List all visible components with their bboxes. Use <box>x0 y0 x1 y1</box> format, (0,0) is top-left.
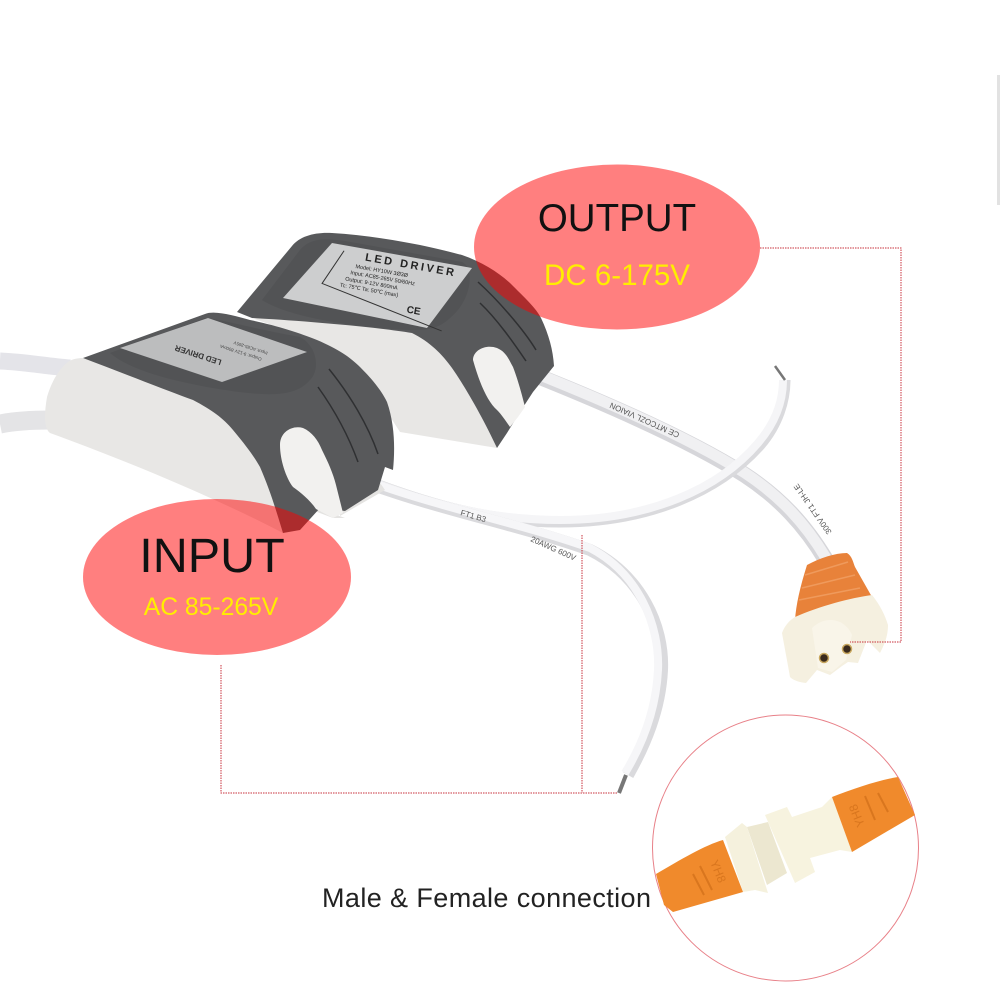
front driver label <box>120 318 307 382</box>
inner barrel <box>747 822 787 885</box>
front LED driver: Input: AC85-265V <box>233 340 268 356</box>
back driver recess <box>262 239 470 330</box>
callout leader: input <box>221 535 618 793</box>
thin input/output cables of front driver: 20AWG 600V <box>529 535 578 563</box>
output cable of back driver: 300V FT1 JH-LE <box>792 482 834 536</box>
back driver label text: Model: HY10W 3Ø3Ø <box>355 264 409 279</box>
sleeve text: YH8 <box>707 858 729 885</box>
front driver recess <box>110 318 316 394</box>
back driver label <box>283 243 472 328</box>
back LED driver <box>237 233 554 448</box>
male plug <box>765 797 852 883</box>
back LED driver: Tc: 75℃ Ta: 50℃ (max) <box>339 283 399 299</box>
back driver white panel <box>252 318 497 448</box>
female collar <box>725 823 768 893</box>
back LED driver: Output: 9-12V 800mA <box>345 276 398 292</box>
thin input/output cables of front driver: FT1 B3 <box>459 508 488 524</box>
sleeve markings <box>693 793 888 895</box>
callout leader: output <box>760 248 901 642</box>
output voltage: DC 6-175V <box>544 259 690 292</box>
front LED driver <box>45 313 394 533</box>
connector orange sleeve <box>795 553 872 620</box>
circular inset: connector: YH8 <box>846 802 868 829</box>
back driver slot <box>473 347 525 427</box>
back driver grooves <box>478 282 536 361</box>
output label: OUTPUT <box>538 197 696 240</box>
back driver body <box>237 233 554 448</box>
front driver white lip <box>310 480 385 518</box>
orange sleeve right <box>832 777 915 852</box>
callout: output <box>474 164 760 330</box>
front driver body <box>83 313 394 533</box>
front driver white panel <box>45 358 283 533</box>
front driver label text: LED DRIVER <box>174 343 223 367</box>
front LED driver: Output: 9-12V 800mA <box>219 344 262 362</box>
thin input/output cables of front driver <box>365 366 785 793</box>
connector white plug <box>782 595 888 683</box>
back driver label title: LED DRIVER <box>364 252 455 279</box>
front driver slot <box>280 427 343 518</box>
input wires behind front driver <box>0 361 70 424</box>
output connector <box>782 553 888 683</box>
male and female connection caption: Male & Female connection <box>322 883 651 913</box>
input voltage: AC 85-265V <box>144 594 279 621</box>
input label: INPUT <box>139 529 285 583</box>
output cable of back driver <box>535 373 834 560</box>
connector holes <box>820 644 852 662</box>
callout: input <box>83 499 351 655</box>
circular inset: connector <box>652 715 918 981</box>
back LED driver: Input: AC85-265V 50/60Hz <box>350 270 415 288</box>
front driver grooves <box>318 369 378 462</box>
orange sleeve left <box>656 840 743 912</box>
output cable of back driver: CE MTCOZL VIAION <box>608 400 681 439</box>
back LED driver: CE <box>406 305 422 318</box>
